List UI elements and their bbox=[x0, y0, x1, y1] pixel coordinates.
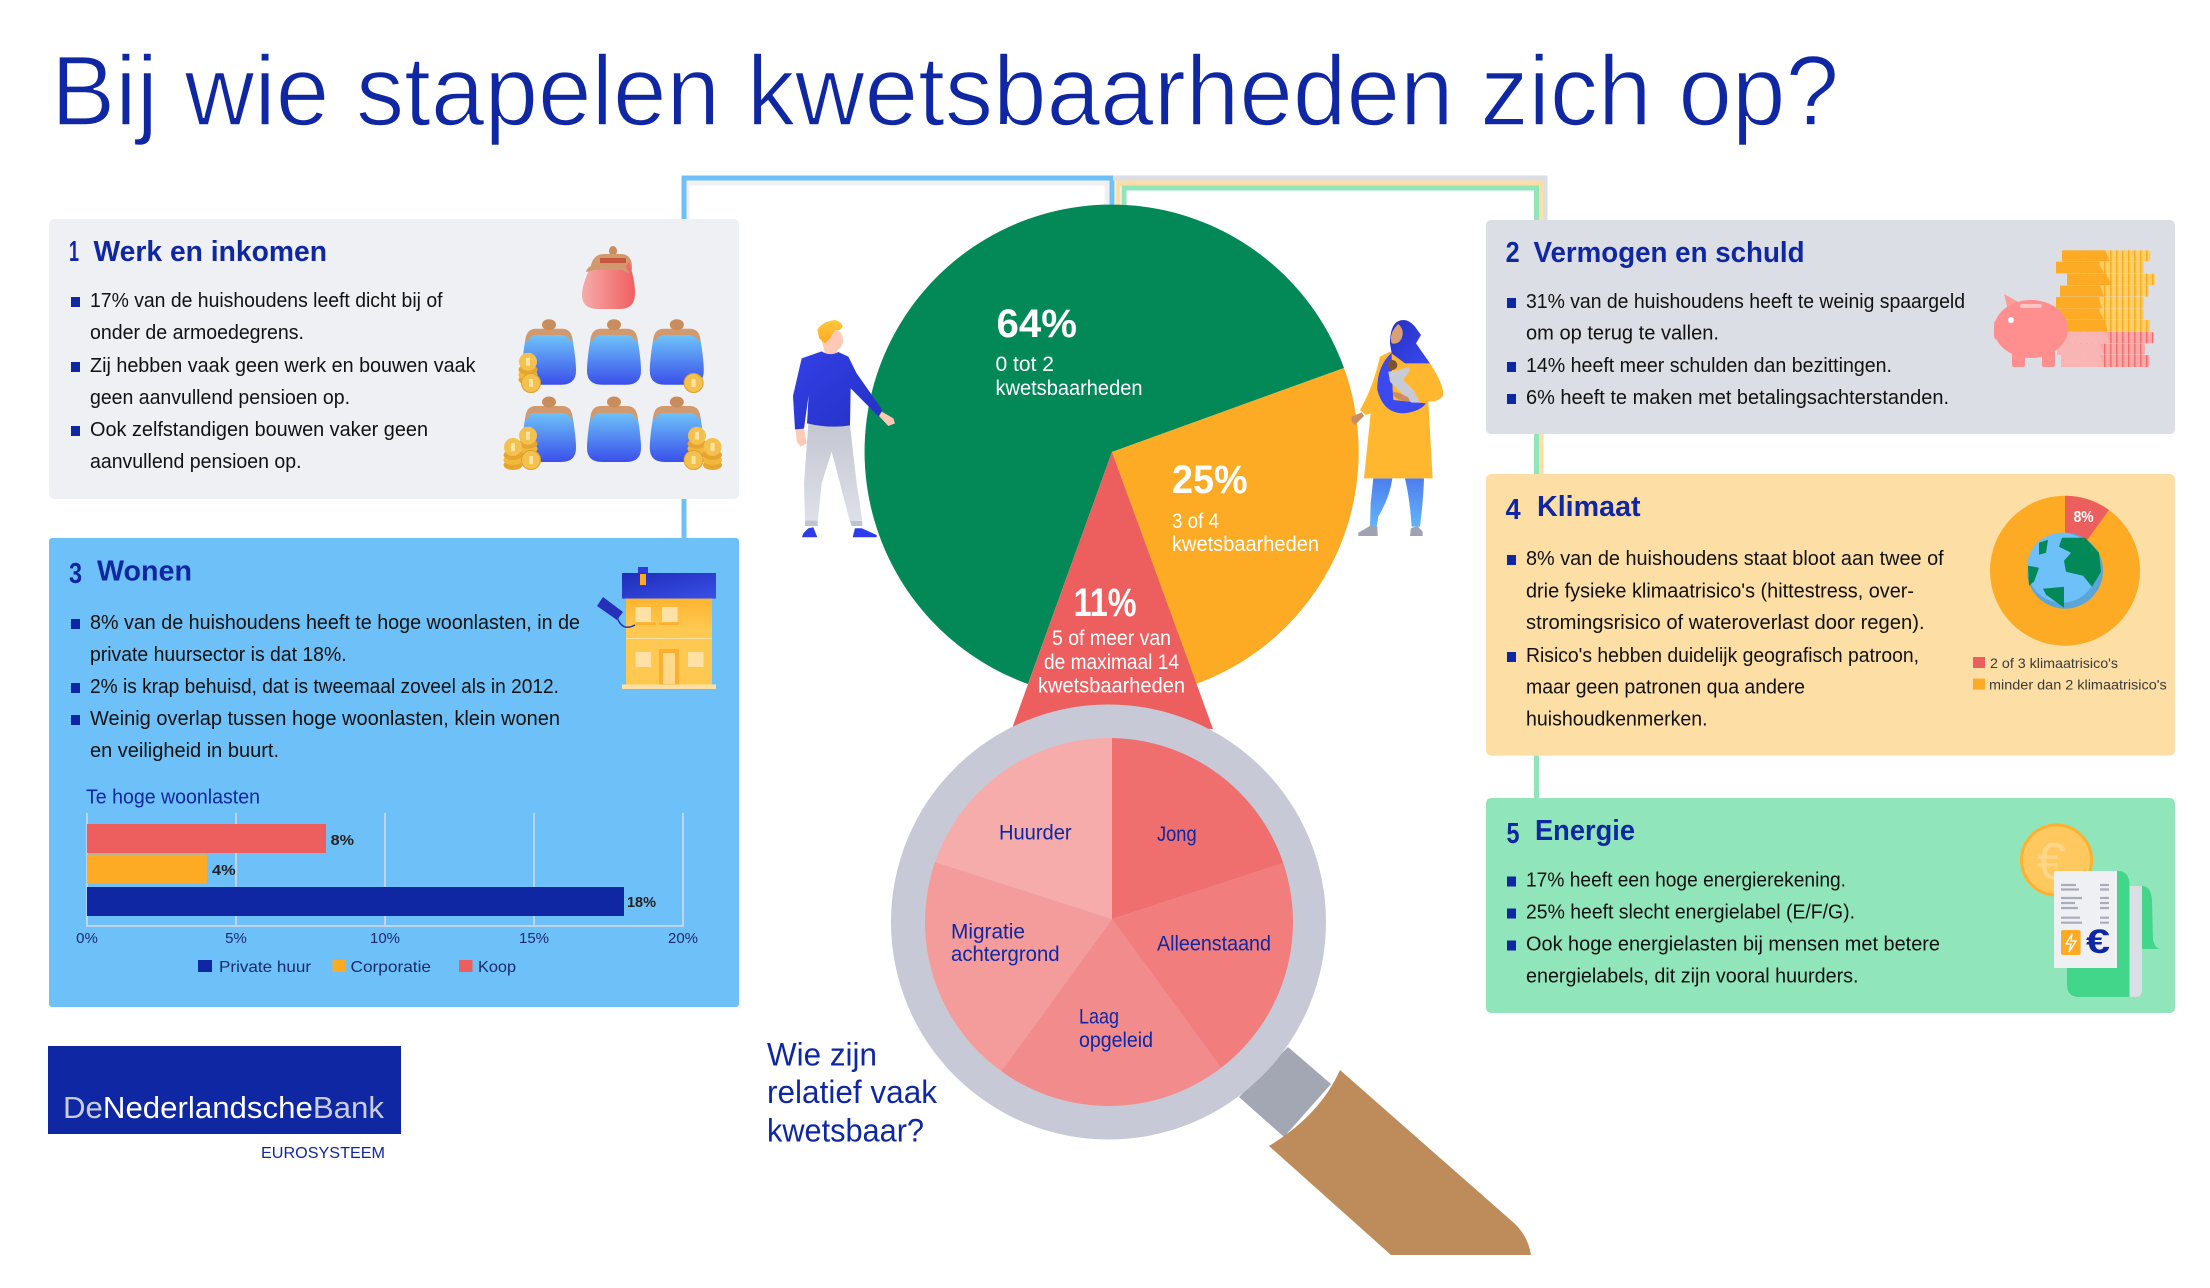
slice: jong bbox=[1112, 738, 1284, 919]
axis labels: 5% bbox=[225, 930, 247, 947]
pie chart: kwetsbaarheden bbox=[865, 205, 1359, 729]
label: 64%: 0 tot 2 bbox=[996, 353, 1054, 376]
magnifying glass bbox=[880, 700, 1531, 1255]
heading: energie: Energie bbox=[1535, 815, 1635, 847]
heading: werk en inkomen: 1 bbox=[69, 236, 79, 268]
legend: Private huur bbox=[219, 959, 312, 976]
slice: migratie achtergrond bbox=[925, 862, 1112, 1071]
bar: koop 8%: 8% bbox=[331, 832, 354, 849]
text block: energie: Ook hoge energielasten bij mensen met betere bbox=[1526, 934, 1940, 956]
legend: Corporatie bbox=[350, 959, 431, 976]
icon: open red purse bbox=[582, 246, 635, 309]
slice: huurder bbox=[935, 738, 1112, 919]
label: 11%: 5 of meer van bbox=[1052, 627, 1171, 650]
text block: wonen: 2% is krap behuisd, dat is tweemaal zoveel als in 2012. bbox=[90, 676, 559, 698]
label: 25%: 3 of 4 bbox=[1172, 510, 1219, 533]
connector: energie line bbox=[1124, 188, 1536, 798]
connector: vermogen line bbox=[1113, 178, 1545, 220]
axis labels: 10% bbox=[370, 930, 400, 947]
bar: private huur 18% bbox=[87, 887, 656, 916]
heading: energie bbox=[1506, 815, 1635, 850]
text block: wonen: Weinig overlap tussen hoge woonlasten, klein wonen bbox=[90, 708, 560, 730]
icon: coin stack bbox=[2056, 250, 2155, 367]
text block: vermogen en schuld: 14% heeft meer schulden dan bezittingen. bbox=[1526, 355, 1892, 377]
text block: vermogen en schuld: om op terug te vallen. bbox=[1526, 322, 1719, 344]
handle neck bbox=[1239, 1047, 1331, 1137]
slice: laag opgeleid bbox=[1002, 919, 1221, 1106]
icon: six blue purses with coins bbox=[504, 319, 722, 470]
slice: 25% bbox=[1112, 368, 1359, 684]
text: wie zijn relatief vaak kwetsbaar: relatief vaak bbox=[767, 1074, 938, 1110]
icon: globe bbox=[2027, 533, 2103, 609]
text block: klimaat: huishoudkenmerken. bbox=[1526, 709, 1708, 731]
label: 64%: 64% bbox=[996, 302, 1077, 346]
heading: klimaat bbox=[1506, 491, 1641, 526]
text block: energie: 25% heeft slecht energielabel (E/F/G). bbox=[1526, 902, 1855, 924]
panel: werk en inkomen bbox=[49, 219, 739, 499]
text block: klimaat: drie fysieke klimaatrisico's (hittestress, over- bbox=[1526, 580, 1914, 602]
text block: klimaat: 8% van de huishoudens staat bloot aan twee of bbox=[1526, 548, 1944, 570]
text block: energie: 17% heeft een hoge energierekening. bbox=[1526, 870, 1846, 892]
text block: klimaat: stromingsrisico of wateroverlast door regen). bbox=[1526, 612, 1925, 634]
label: 11%: kwetsbaarheden bbox=[1038, 674, 1185, 698]
heading: klimaat: 4 bbox=[1506, 494, 1521, 526]
panel: klimaat bbox=[1486, 474, 2175, 756]
label: migratie achtergrond bbox=[951, 920, 1060, 966]
axis labels: 0% bbox=[76, 930, 98, 947]
label: migratie achtergrond: Migratie bbox=[951, 920, 1025, 944]
text: wie zijn relatief vaak kwetsbaar bbox=[767, 1037, 938, 1149]
text block: werk en inkomen: geen aanvullend pensioen op. bbox=[90, 387, 350, 409]
slice: 11% bbox=[1012, 452, 1213, 729]
title: Bij wie stapelen kwetsbaarheden zich op? bbox=[51, 35, 1839, 146]
icon: euro coin bbox=[2022, 825, 2092, 895]
label: jong: Jong bbox=[1157, 823, 1197, 846]
heading: wonen: Wonen bbox=[97, 556, 192, 588]
text block: werk en inkomen: onder de armoedegrens. bbox=[90, 322, 304, 344]
icon: euro coin: € bbox=[2037, 833, 2066, 891]
connector: klimaat line bbox=[1118, 183, 1541, 474]
panel: wonen bbox=[49, 538, 739, 1007]
panel: vermogen en schuld bbox=[1486, 220, 2175, 434]
heading: energie: 5 bbox=[1506, 818, 1520, 850]
axis labels: 15% bbox=[519, 930, 549, 947]
label: 64% bbox=[996, 302, 1142, 400]
bar: private huur 18%: 18% bbox=[627, 894, 656, 911]
connector: wonen line bbox=[684, 178, 1112, 538]
label: 11% bbox=[1038, 581, 1185, 698]
text block: klimaat: Risico's hebben duidelijk geografisch patroon, bbox=[1526, 645, 1919, 667]
text block: klimaat bbox=[1507, 548, 1944, 731]
text block: wonen: private huursector is dat 18%. bbox=[90, 644, 347, 666]
bar chart: te hoge woonlasten bbox=[76, 787, 698, 976]
axis labels bbox=[76, 930, 698, 947]
label: 11%: 11% bbox=[1074, 581, 1137, 625]
text block: energie: energielabels, dit zijn vooral huurders. bbox=[1526, 966, 1858, 988]
heading: wonen: 3 bbox=[69, 558, 82, 590]
label: migratie achtergrond: achtergrond bbox=[951, 943, 1060, 966]
text block: wonen: en veiligheid in buurt. bbox=[90, 740, 279, 762]
text block: werk en inkomen: aanvullend pensioen op. bbox=[90, 451, 302, 473]
label: 25%: 25% bbox=[1172, 458, 1248, 502]
text block: wonen: 8% van de huishoudens heeft te hoge woonlasten, in de bbox=[90, 612, 580, 634]
text block: vermogen en schuld: 31% van de huishoudens heeft te weinig spaargeld bbox=[1526, 291, 1965, 313]
legend bbox=[198, 959, 516, 976]
logo: De Nederlandsche Bank: EUROSYSTEEM bbox=[261, 1145, 385, 1162]
text: wie zijn relatief vaak kwetsbaar: kwetsbaar? bbox=[767, 1113, 924, 1149]
label: alleenstaand: Alleenstaand bbox=[1157, 932, 1271, 956]
bar: corporatie 4% bbox=[87, 854, 236, 884]
legend: Koop bbox=[478, 959, 516, 976]
icon: energy bill: € bbox=[2086, 923, 2110, 961]
text block: werk en inkomen: Ook zelfstandigen bouwen vaker geen bbox=[90, 419, 428, 441]
slice: alleenstaand bbox=[1112, 863, 1293, 1068]
logo: De Nederlandsche Bank: DeNederlandscheBank bbox=[63, 1090, 384, 1125]
logo: De Nederlandsche Bank bbox=[48, 1046, 401, 1162]
chart title: Te hoge woonlasten bbox=[86, 787, 260, 809]
heading: klimaat: Klimaat bbox=[1537, 491, 1641, 523]
figure: man bbox=[793, 320, 895, 537]
handle grip bbox=[1269, 1070, 1531, 1255]
text block: klimaat: maar geen patronen qua andere bbox=[1526, 676, 1805, 698]
figure: woman with baby bbox=[1352, 320, 1443, 536]
label: laag opgeleid: Laag bbox=[1079, 1006, 1119, 1029]
text block: werk en inkomen: 17% van de huishoudens leeft dicht bij of bbox=[90, 290, 443, 312]
gridlines bbox=[87, 813, 684, 926]
panel: energie bbox=[1486, 798, 2175, 1013]
bar: koop 8% bbox=[87, 824, 354, 853]
donut chart with globe bbox=[1973, 496, 2167, 692]
label: 11%: de maximaal 14 bbox=[1044, 651, 1179, 674]
lens ring bbox=[891, 704, 1326, 1140]
label: 25%: kwetsbaarheden bbox=[1172, 533, 1319, 556]
icon: piggy bank bbox=[1994, 294, 2068, 367]
bar: corporatie 4%: 4% bbox=[212, 862, 236, 879]
label: 25% bbox=[1172, 458, 1319, 556]
text block: werk en inkomen bbox=[71, 290, 476, 473]
legend: minder dan 2 klimaatrisico's bbox=[1989, 676, 2167, 692]
lens pie chart bbox=[925, 738, 1293, 1106]
label: 64%: kwetsbaarheden bbox=[996, 377, 1142, 400]
text: wie zijn relatief vaak kwetsbaar: Wie zijn bbox=[767, 1037, 877, 1073]
legend: 2 of 3 klimaatrisico's bbox=[1990, 655, 2118, 671]
heading: vermogen en schuld: 2 bbox=[1506, 237, 1520, 269]
text block: wonen bbox=[71, 612, 580, 762]
text block: energie bbox=[1507, 870, 1940, 988]
icon: house with price tag bbox=[597, 567, 716, 689]
text block: vermogen en schuld bbox=[1507, 291, 1965, 409]
heading: werk en inkomen: Werk en inkomen bbox=[94, 236, 327, 268]
label: laag opgeleid bbox=[1079, 1006, 1153, 1052]
legend bbox=[1973, 655, 2167, 692]
text block: vermogen en schuld: 6% heeft te maken met betalingsachterstanden. bbox=[1526, 387, 1949, 409]
axis labels: 20% bbox=[668, 930, 698, 947]
label: huurder: Huurder bbox=[999, 822, 1072, 844]
heading: vermogen en schuld: Vermogen en schuld bbox=[1534, 237, 1804, 269]
icon: energy bill bbox=[2054, 871, 2160, 997]
connector: werk en inkomen line bbox=[687, 183, 1107, 499]
donut chart with globe: 8% bbox=[2074, 509, 2094, 526]
slice: 64% bbox=[865, 205, 1344, 684]
text block: werk en inkomen: Zij hebben vaak geen werk en bouwen vaak bbox=[90, 355, 476, 377]
label: laag opgeleid: opgeleid bbox=[1079, 1029, 1153, 1052]
